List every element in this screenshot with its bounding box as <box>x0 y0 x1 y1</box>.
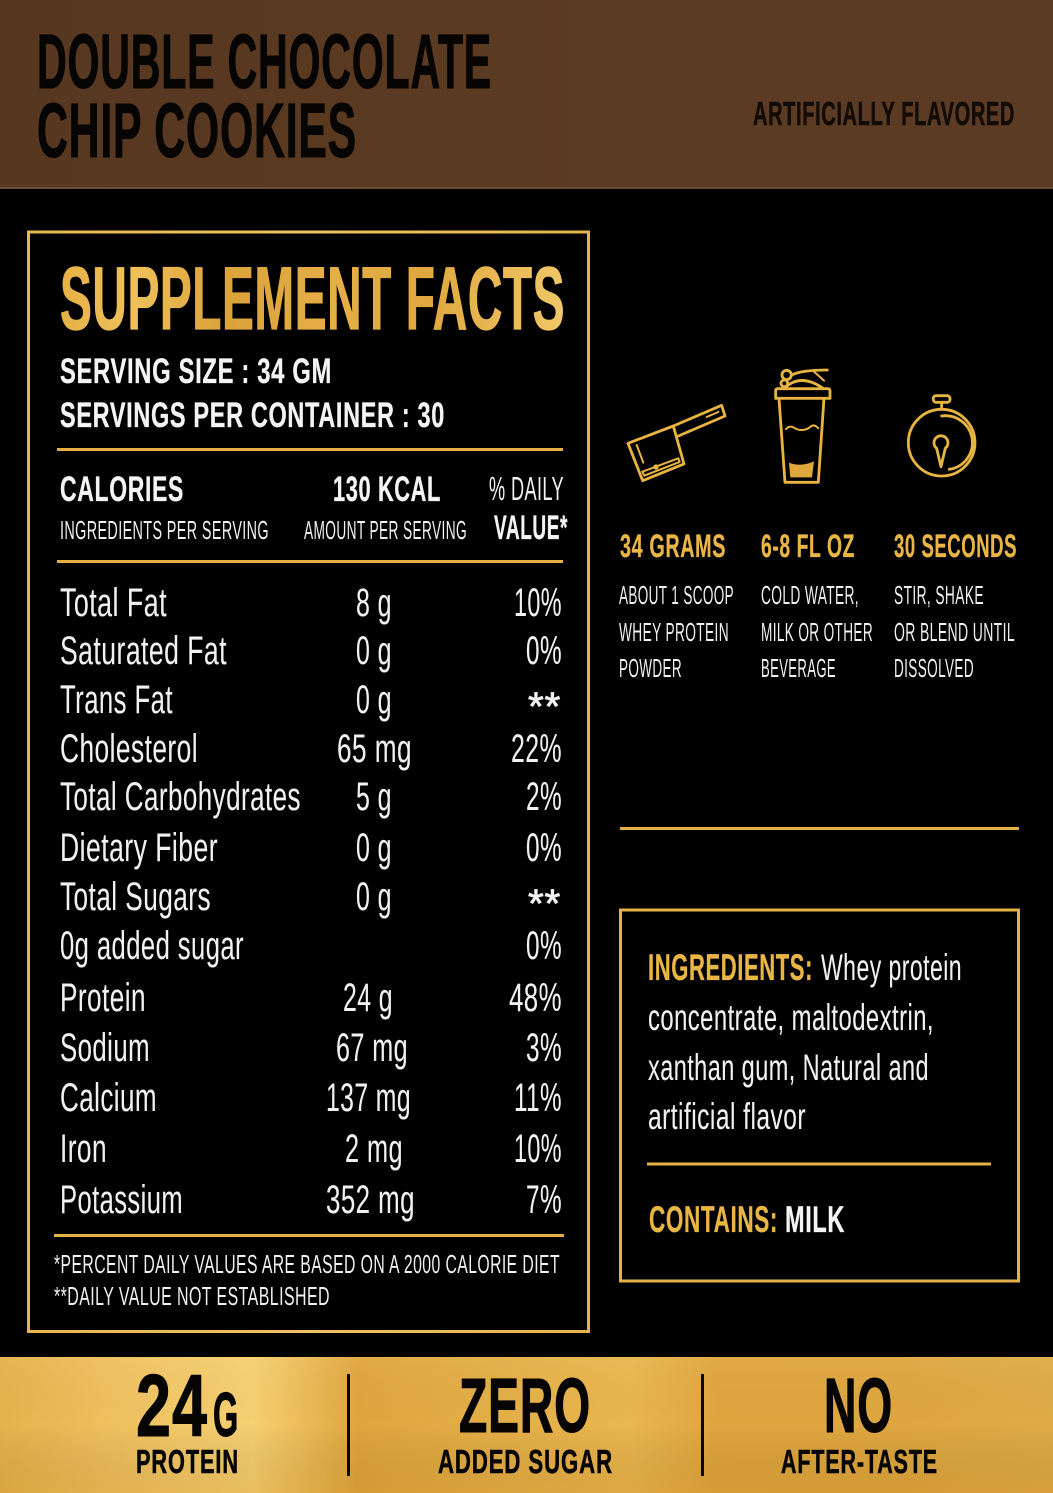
step: 6-8 fl oz <box>761 528 873 683</box>
nutrient names: Total Fat <box>60 581 167 625</box>
table header: VALUE* <box>494 509 568 547</box>
serving information <box>60 352 445 435</box>
table header <box>60 470 568 547</box>
claim: no after-taste: NO <box>824 1363 893 1449</box>
percent daily values: 10% <box>514 1127 562 1171</box>
nutrient names: Potassium <box>60 1178 183 1222</box>
panel: supplement facts <box>28 232 588 1332</box>
step: 6-8 fl oz: BEVERAGE <box>761 653 836 683</box>
nutrient names: Dietary Fiber <box>60 826 218 870</box>
panel: directions <box>619 370 1017 683</box>
ingredients text: artificial flavor <box>648 1096 806 1137</box>
percent daily values: 22% <box>511 727 562 771</box>
nutrient names: Protein <box>60 976 146 1020</box>
nutrient names: Cholesterol <box>60 727 198 771</box>
footnotes <box>54 1249 560 1311</box>
allergen statement: MILK <box>785 1199 845 1240</box>
amounts per serving: 0 g <box>356 629 392 673</box>
heading: supplement facts: SUPPLEMENT FACTS <box>60 248 565 348</box>
step: 34 grams: 34 GRAMS <box>620 528 726 564</box>
step: 30 seconds: DISSOLVED <box>894 653 974 683</box>
amounts per serving <box>326 581 415 1222</box>
step: 34 grams: POWDER <box>619 653 682 683</box>
nutrient names: Saturated Fat <box>60 629 227 673</box>
product title: CHIP COOKIES <box>37 88 357 174</box>
amounts per serving: 137 mg <box>326 1076 411 1120</box>
nutrient names: Sodium <box>60 1026 150 1070</box>
footnotes: **DAILY VALUE NOT ESTABLISHED <box>54 1281 330 1311</box>
percent daily values: 3% <box>526 1026 562 1070</box>
ingredients text: INGREDIENTS: <box>648 947 813 988</box>
amounts per serving: 0 g <box>356 826 392 870</box>
percent daily values: 0% <box>526 924 562 968</box>
amounts per serving: 65 mg <box>337 727 412 771</box>
claim: 24g protein: 24 <box>136 1356 208 1455</box>
step: 34 grams <box>619 528 734 683</box>
nutrient names <box>60 581 301 1222</box>
table header: CALORIES <box>60 470 184 509</box>
header band <box>0 0 1053 189</box>
step: 6-8 fl oz: MILK OR OTHER <box>761 617 873 647</box>
table header: AMOUNT PER SERVING <box>304 515 467 545</box>
amounts per serving: 8 g <box>356 581 392 625</box>
step: 34 grams: ABOUT 1 SCOOP <box>619 580 734 610</box>
percent daily values: 10% <box>514 581 562 625</box>
percent daily values: 2% <box>526 775 562 819</box>
table header: INGREDIENTS PER SERVING <box>60 515 269 545</box>
claim: no after-taste <box>781 1363 938 1480</box>
amounts per serving: 24 g <box>343 976 393 1020</box>
claim: zero added sugar <box>438 1363 613 1480</box>
bottom claims band <box>0 1356 1053 1493</box>
serving information: SERVINGS PER CONTAINER : 30 <box>60 396 445 435</box>
nutrient names: Trans Fat <box>60 678 173 722</box>
percent daily values: ** <box>528 685 561 729</box>
step: 6-8 fl oz: 6-8 FL OZ <box>761 528 855 564</box>
percent daily values: ** <box>528 882 561 926</box>
icon: shaker bottle <box>776 370 830 482</box>
percent daily values: 0% <box>526 826 562 870</box>
allergen statement: CONTAINS: <box>649 1199 778 1240</box>
icon: stopwatch <box>908 396 975 476</box>
nutrient names: 0g added sugar <box>60 924 244 968</box>
claim: 24g protein: G <box>213 1381 239 1450</box>
nutrient names: Iron <box>60 1127 107 1171</box>
amounts per serving: 67 mg <box>336 1026 408 1070</box>
claim: no after-taste: AFTER-TASTE <box>781 1443 938 1480</box>
panel: ingredients <box>620 910 1018 1281</box>
percent daily values: 11% <box>514 1076 562 1120</box>
ingredients text <box>648 947 962 1137</box>
nutrient names: Total Carbohydrates <box>60 775 301 819</box>
percent daily values: 48% <box>509 976 562 1020</box>
nutrient names: Calcium <box>60 1076 157 1120</box>
amounts per serving: 0 g <box>356 678 392 722</box>
table header: 130 KCAL <box>333 470 441 509</box>
percent daily values: 0% <box>526 629 562 673</box>
step: 30 seconds <box>894 528 1017 683</box>
step: 6-8 fl oz: COLD WATER, <box>761 580 859 610</box>
amounts per serving: 0 g <box>356 875 392 919</box>
claim: 24g protein: PROTEIN <box>136 1443 239 1480</box>
serving information: SERVING SIZE : 34 GM <box>60 352 332 391</box>
amounts per serving: 5 g <box>356 775 392 819</box>
claim: zero added sugar: ADDED SUGAR <box>438 1443 613 1480</box>
nutrient names: Total Sugars <box>60 875 211 919</box>
percent daily values: 7% <box>526 1178 562 1222</box>
footnotes: *PERCENT DAILY VALUES ARE BASED ON A 2000 CALORIE DIET <box>54 1249 560 1279</box>
product title <box>37 19 492 174</box>
percent daily values <box>509 581 562 1222</box>
claim: zero added sugar: ZERO <box>459 1363 591 1449</box>
step: 34 grams: WHEY PROTEIN <box>619 617 729 647</box>
amounts per serving: 352 mg <box>326 1178 415 1222</box>
ingredients text: Whey protein <box>821 947 962 988</box>
icon: scoop <box>628 405 725 481</box>
product title: DOUBLE CHOCOLATE <box>37 19 492 105</box>
amounts per serving: 2 mg <box>345 1127 403 1171</box>
table header: % DAILY <box>489 470 564 507</box>
